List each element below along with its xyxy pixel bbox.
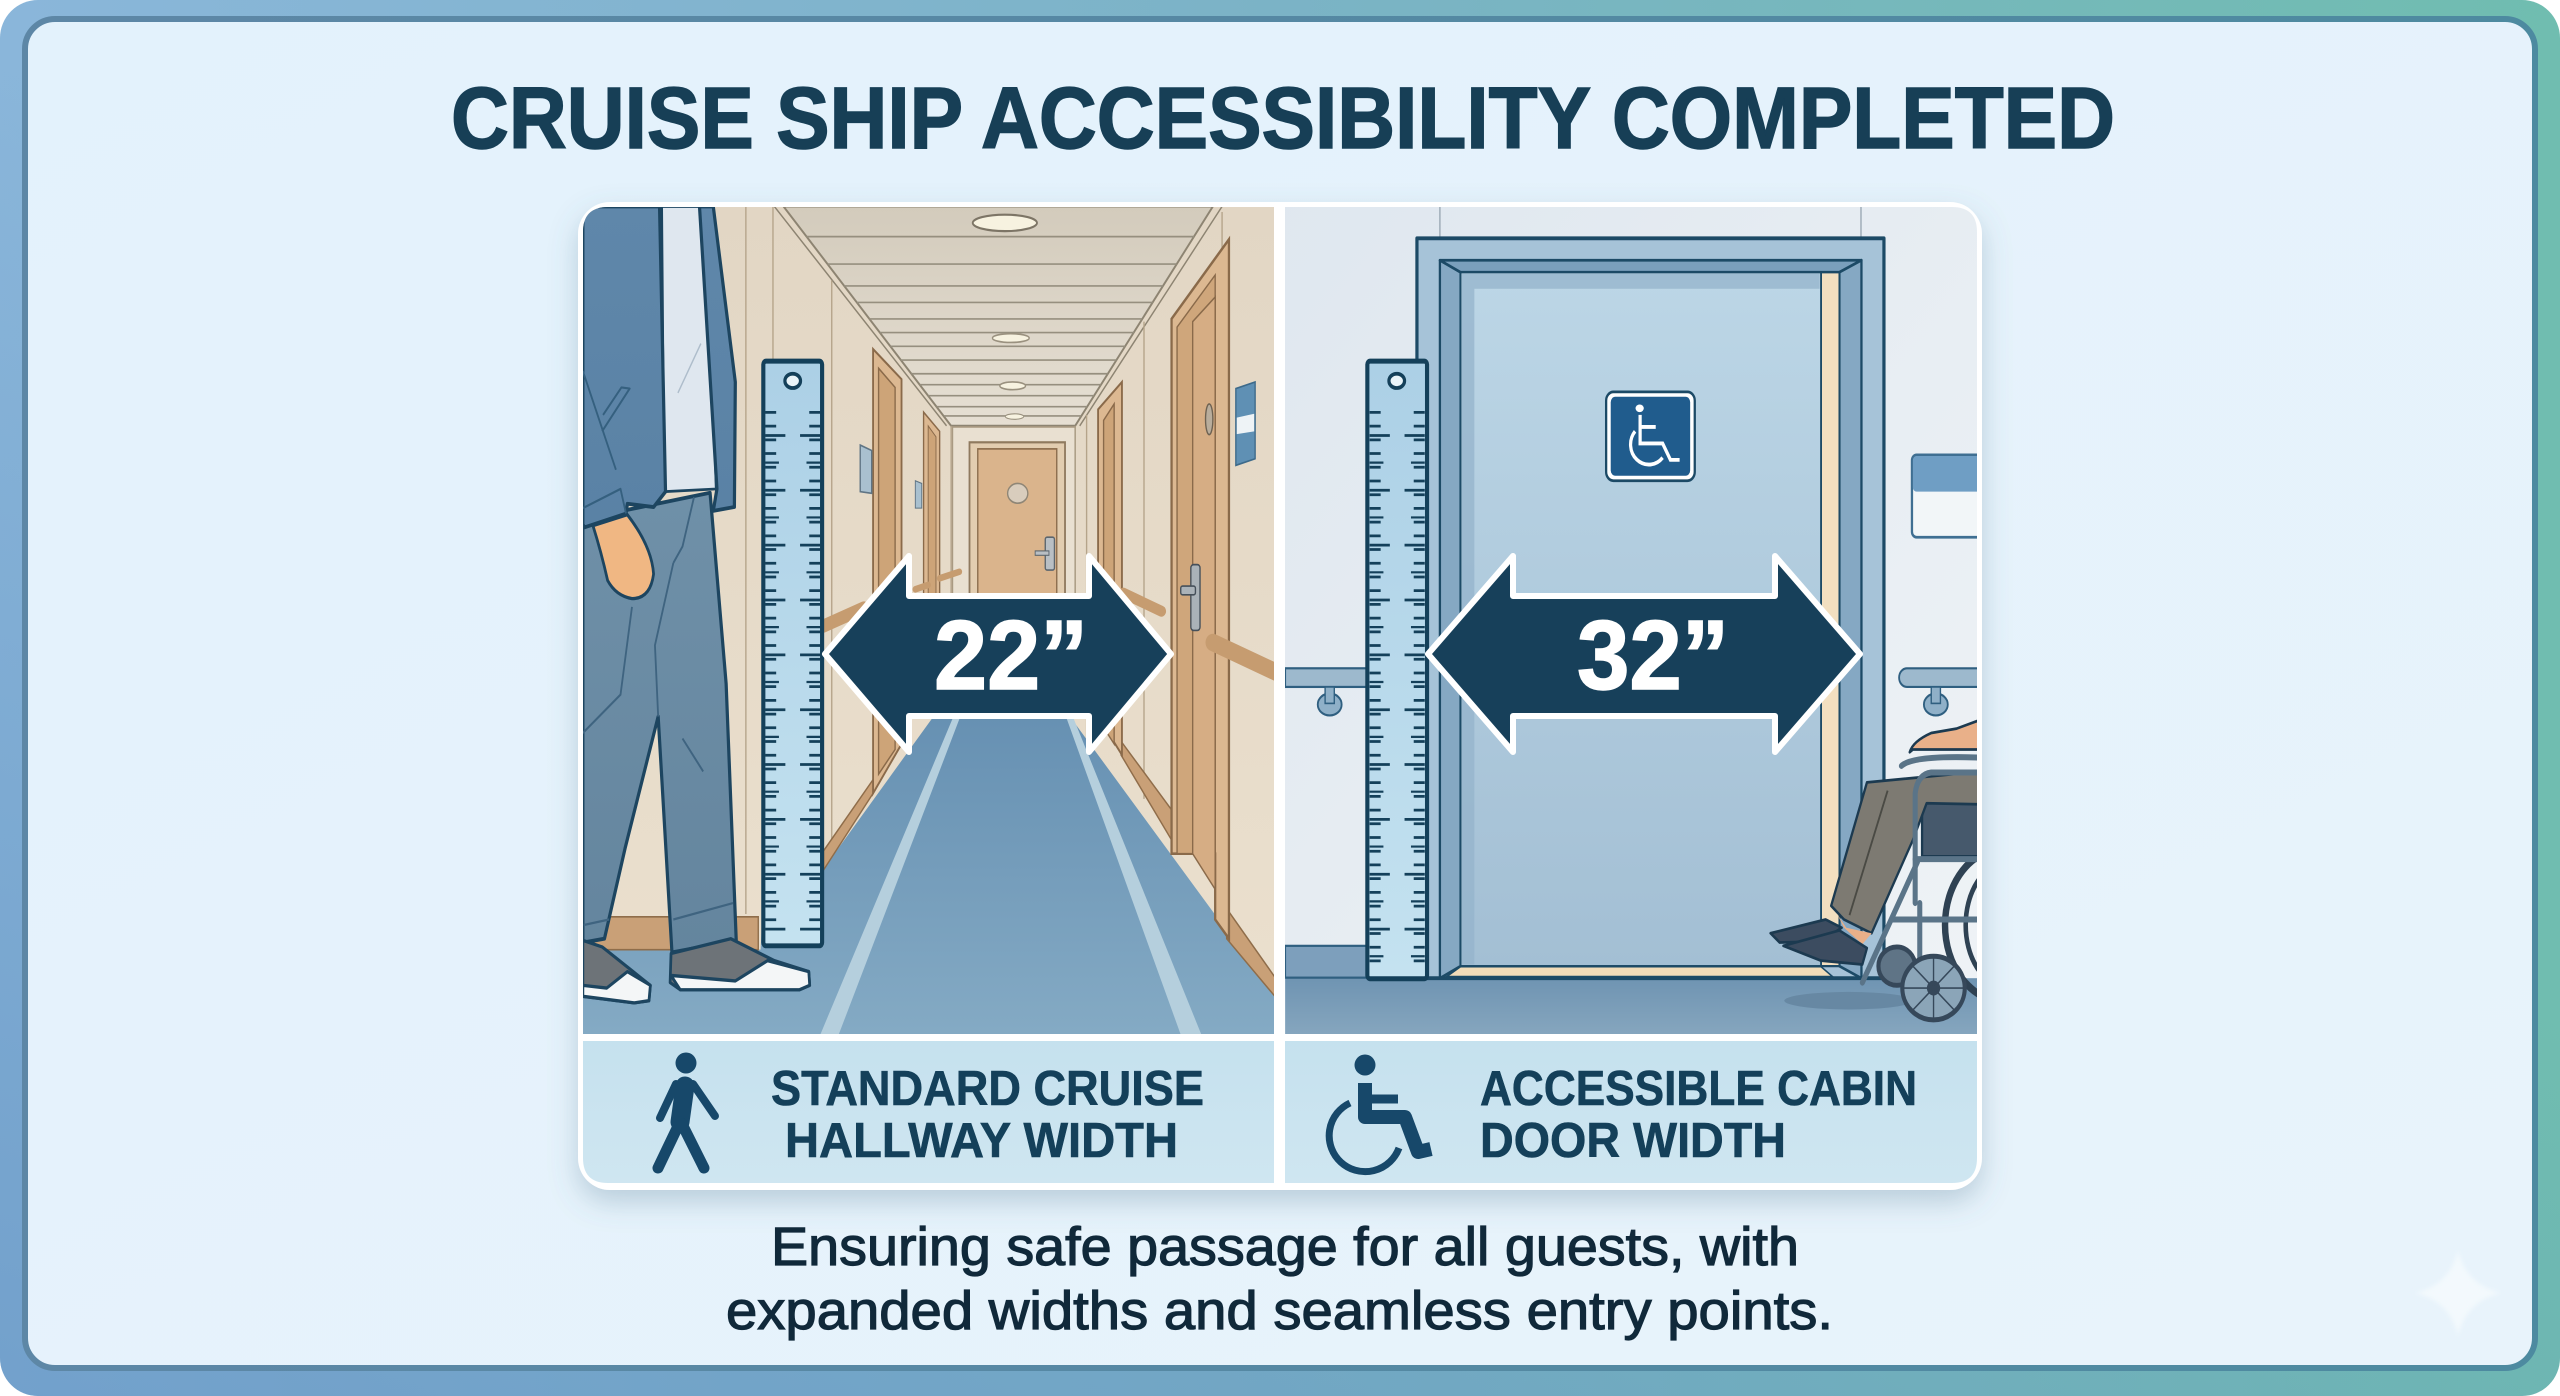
icon: walking person xyxy=(658,1052,715,1168)
icon: sparkle watermark xyxy=(2415,1250,2501,1336)
floor stripes xyxy=(820,717,1201,1035)
baseboards xyxy=(583,741,1275,996)
handrails xyxy=(823,572,1277,673)
label panel: accessible cabin door width xyxy=(1285,1041,1977,1183)
wall seam lines xyxy=(1440,206,1861,238)
caption text: Ensuring safe passage for all guests, with xyxy=(771,1217,1799,1277)
hand and armrest xyxy=(1910,719,1982,752)
far wall and door xyxy=(953,427,1075,602)
left wall doors xyxy=(860,349,940,793)
door leaf xyxy=(1461,272,1821,966)
door frame xyxy=(1417,238,1884,978)
arrow: 32 inch width xyxy=(1428,556,1860,752)
person: jacket xyxy=(583,206,735,527)
hallway floor xyxy=(583,711,1275,1035)
label text: door: ACCESSIBLE CABIN xyxy=(1480,1062,1917,1116)
hallway ceiling and lights xyxy=(774,206,1222,426)
icon: wheelchair user xyxy=(1329,1054,1431,1172)
card backing xyxy=(578,202,1982,1190)
person in wheelchair xyxy=(1769,720,1977,1022)
baseboard xyxy=(1285,946,1368,978)
label text: door: DOOR WIDTH xyxy=(1480,1114,1786,1168)
small wheels xyxy=(1878,947,1965,1020)
wall plate xyxy=(1912,455,1985,537)
large wheel xyxy=(1945,848,2064,1002)
feet xyxy=(1771,920,1867,964)
label panel: standard cruise hallway width xyxy=(583,1041,1274,1183)
legs xyxy=(1831,771,1982,944)
comparison card xyxy=(570,190,2064,1190)
label text: hallway: HALLWAY WIDTH xyxy=(785,1114,1178,1168)
floor xyxy=(1285,978,1979,1039)
label text: hallway: STANDARD CRUISE xyxy=(771,1062,1204,1116)
panel: hallway illustration xyxy=(570,190,1290,1050)
person: hand xyxy=(593,515,654,599)
ruler xyxy=(763,361,822,946)
floor shadow under wheelchair xyxy=(1784,992,1913,1009)
person: pants xyxy=(583,493,736,952)
threshold xyxy=(1447,967,1833,977)
title: CRUISE SHIP ACCESSIBILITY COMPLETED xyxy=(451,70,2115,167)
arrow: 22 inch width xyxy=(825,556,1171,752)
arrow: 22 inch width: 22” xyxy=(934,600,1088,710)
arrow: 32 inch width: 32” xyxy=(1577,600,1729,710)
wheelchair frame xyxy=(1862,757,1982,983)
label text: hallway xyxy=(771,1062,1204,1168)
handrails xyxy=(1285,668,1984,715)
person: shoes xyxy=(583,939,810,1003)
wall panel lines xyxy=(746,206,1222,914)
ruler xyxy=(1367,361,1427,979)
right wall doors and sign xyxy=(1098,239,1255,939)
label text: door xyxy=(1480,1062,1917,1168)
panel: accessible door illustration xyxy=(1285,207,1977,1034)
wall xyxy=(1285,207,1977,978)
accessibility sign xyxy=(1606,392,1695,481)
caption text: expanded widths and seamless entry points. xyxy=(726,1281,1833,1341)
caption text xyxy=(726,1217,1833,1341)
wheelchair seat xyxy=(1922,802,1982,856)
hallway walls xyxy=(584,207,1274,974)
person: shirt xyxy=(662,206,716,492)
